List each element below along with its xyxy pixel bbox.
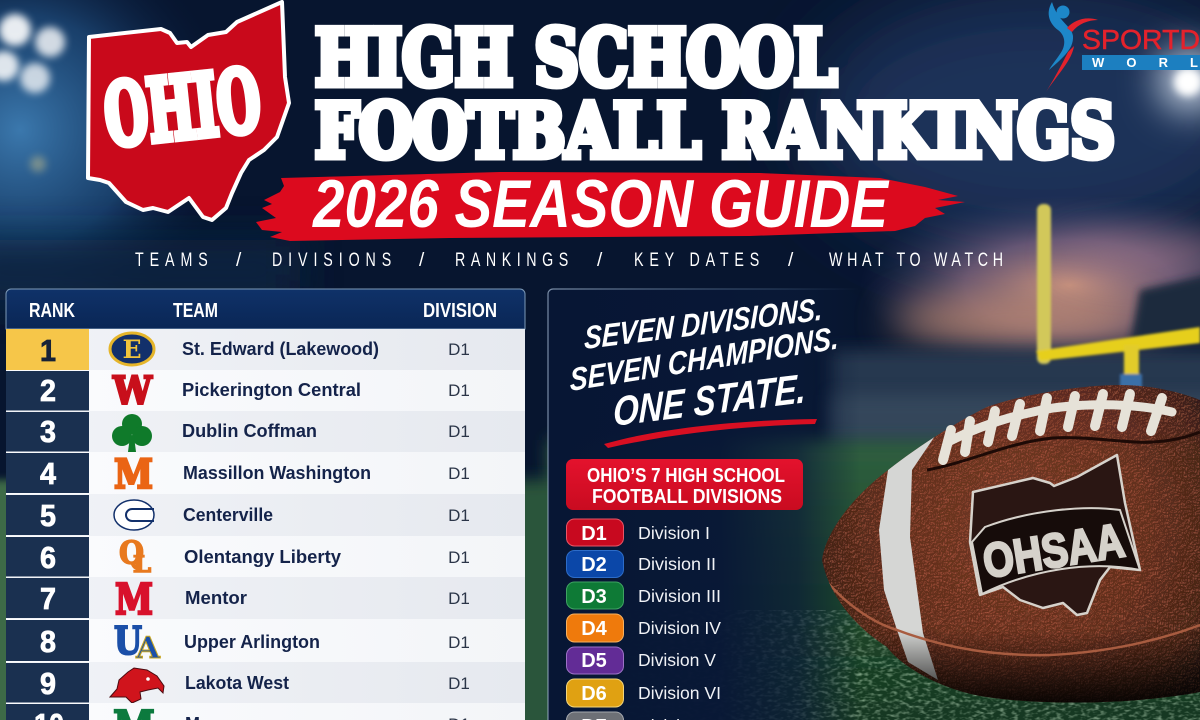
row 8: U xyxy=(114,618,142,663)
row 6: 6 xyxy=(40,540,56,575)
row 4 xyxy=(6,451,525,498)
row 9: Lakota West xyxy=(185,673,289,693)
divisions heading xyxy=(566,459,803,510)
divisions heading: OHIO’S 7 HIGH SCHOOL xyxy=(587,464,785,487)
title: FOOTBALL RANKINGS xyxy=(315,87,1115,175)
row 1 xyxy=(6,329,525,370)
row 5: Centerville xyxy=(183,505,273,525)
row 3: 3 xyxy=(40,414,56,449)
navigation strip xyxy=(135,249,1003,271)
row 6: D1 xyxy=(448,548,470,567)
row 8: D1 xyxy=(448,633,470,652)
navigation strip: RANKINGS xyxy=(455,249,568,271)
brand logo xyxy=(1046,2,1200,92)
navigation strip: DIVISIONS xyxy=(272,249,391,271)
division V: Division V xyxy=(638,650,716,670)
brand logo: WORL xyxy=(1092,55,1198,70)
Ohio state logo with OHIO text xyxy=(88,2,289,220)
row 2: 2 xyxy=(40,373,56,408)
division IV xyxy=(566,614,721,642)
row 2: Pickerington Central xyxy=(182,380,361,400)
tagline: SEVEN DIVISIONS. xyxy=(584,291,823,356)
division VI xyxy=(566,679,721,707)
row 3: Dublin Coffman xyxy=(182,421,317,441)
division III xyxy=(566,582,721,609)
row 6: Olentangy Liberty xyxy=(184,547,341,567)
row 4: D1 xyxy=(448,464,470,483)
goal post xyxy=(1036,204,1200,390)
row 8: 8 xyxy=(40,624,56,659)
division III: D3 xyxy=(581,586,607,608)
row 2: W xyxy=(112,368,153,413)
OHSAA logo: OHSAA xyxy=(979,514,1128,589)
division II xyxy=(566,550,716,578)
row 4: Massillon Washington xyxy=(183,463,371,483)
division II: Division II xyxy=(638,554,716,574)
row 4: M xyxy=(114,451,153,498)
navigation strip: / xyxy=(597,250,603,271)
row 3: D1 xyxy=(448,422,470,441)
row 1: D1 xyxy=(448,340,470,359)
row 7 xyxy=(6,575,525,624)
division I: D1 xyxy=(581,523,607,545)
row 1: E xyxy=(122,335,142,364)
table header xyxy=(6,289,525,329)
row 4: 4 xyxy=(40,456,57,491)
row 6 xyxy=(6,534,525,578)
OHSAA logo xyxy=(970,455,1140,615)
division VI: D6 xyxy=(581,683,607,705)
laces xyxy=(943,394,1172,460)
football xyxy=(815,380,1200,710)
row 5 xyxy=(6,494,525,536)
division I xyxy=(566,519,710,546)
table header: RANK xyxy=(29,300,75,322)
row 7: Mentor xyxy=(185,588,247,608)
row 2: D1 xyxy=(448,381,470,400)
division V xyxy=(566,647,716,674)
row 2 xyxy=(6,368,525,413)
row 10 xyxy=(6,702,525,720)
row 1: 1 xyxy=(40,333,56,368)
navigation strip: / xyxy=(236,250,242,271)
division VI: Division VI xyxy=(638,683,721,703)
navigation strip: / xyxy=(419,250,425,271)
banner: 2026 season guide: 2026 SEASON GUIDE xyxy=(311,166,890,242)
row 9 xyxy=(6,662,525,703)
table header: DIVISION xyxy=(423,300,497,322)
panel: seven divisions xyxy=(548,289,860,720)
row 9: D1 xyxy=(448,674,470,693)
row 6: Q xyxy=(119,534,144,572)
panel: rankings table xyxy=(6,289,525,720)
division IV: D4 xyxy=(581,618,608,640)
table header: TEAM xyxy=(173,300,218,322)
stripe xyxy=(879,436,938,680)
division IV: Division IV xyxy=(638,618,721,638)
navigation strip: / xyxy=(788,250,794,271)
row 9: 9 xyxy=(40,666,56,701)
row 8: Upper Arlington xyxy=(184,632,320,652)
divisions heading: FOOTBALL DIVISIONS xyxy=(592,485,782,508)
brand logo: SPORTD xyxy=(1082,24,1200,55)
division III: Division III xyxy=(638,586,721,606)
row 6: L xyxy=(133,552,151,578)
title xyxy=(315,13,1115,175)
navigation strip: TEAMS xyxy=(135,249,208,271)
row 7: D1 xyxy=(448,589,470,608)
title: HIGH SCHOOL xyxy=(315,13,837,104)
division V: D5 xyxy=(581,650,607,672)
tagline: SEVEN CHAMPIONS. xyxy=(569,319,839,398)
row 7: M xyxy=(115,575,153,624)
division II: D2 xyxy=(581,554,607,576)
division I: Division I xyxy=(638,523,710,543)
OHIO state word: OHIO xyxy=(100,50,265,167)
tagline: ONE STATE. xyxy=(613,365,806,435)
row 7: 7 xyxy=(40,581,56,616)
navigation strip: WHAT TO WATCH xyxy=(829,249,1003,271)
row 8: A xyxy=(135,631,161,666)
row 5: 5 xyxy=(40,498,56,533)
row 8 xyxy=(6,618,525,666)
tagline xyxy=(569,291,839,448)
row 1: St. Edward (Lakewood) xyxy=(182,339,379,359)
row 5: D1 xyxy=(448,506,470,525)
row 3 xyxy=(6,411,525,452)
division VII xyxy=(566,712,726,720)
navigation strip: KEY DATES xyxy=(634,249,759,271)
